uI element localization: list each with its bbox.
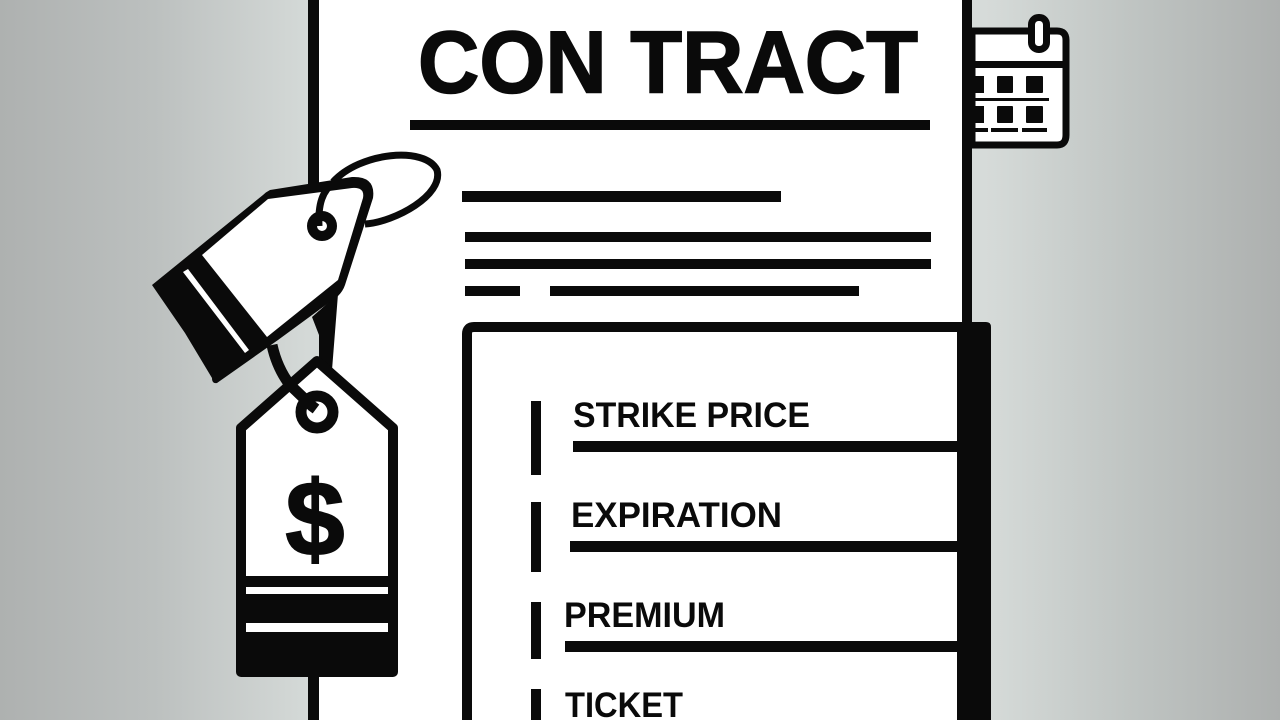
panel: contract terms bbox=[467, 322, 991, 720]
icon: hanging dollar price tag bbox=[241, 345, 393, 672]
icon: connecting wedge bbox=[312, 294, 338, 370]
term: expiration: EXPIRATION bbox=[571, 496, 782, 535]
term: strike price: STRIKE PRICE bbox=[573, 396, 810, 435]
icon: calendar bbox=[972, 18, 1066, 145]
tag string bbox=[272, 345, 316, 409]
title: CON TRACT bbox=[418, 12, 918, 112]
term: strike price bbox=[531, 396, 957, 475]
term: premium: PREMIUM bbox=[564, 596, 725, 635]
panel right bar bbox=[957, 322, 991, 720]
term: premium bbox=[531, 596, 957, 659]
icon: tilted price tag bbox=[152, 177, 373, 383]
title rule bbox=[410, 120, 930, 130]
contract page bbox=[308, 0, 972, 720]
dollar sign: $ bbox=[286, 460, 344, 578]
body text lines bbox=[462, 191, 931, 296]
icon: tag string loop bbox=[333, 155, 438, 224]
term: expiration bbox=[531, 496, 957, 572]
